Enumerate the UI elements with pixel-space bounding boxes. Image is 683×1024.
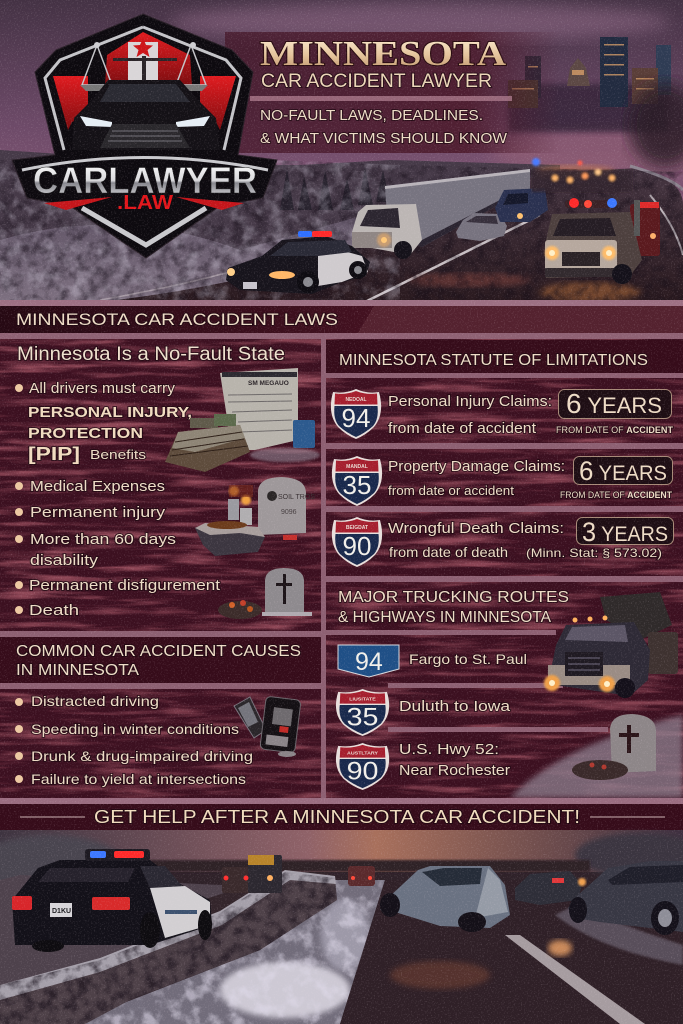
heading: statute of limitations: MINNESOTA STATUTE OF LIMITATIONS bbox=[339, 352, 648, 369]
icon: interstate shield 35: MANDAL bbox=[346, 464, 368, 470]
heading: no-fault state: Minnesota Is a No-Fault State bbox=[17, 344, 285, 365]
police car bbox=[226, 231, 370, 294]
bullet list: causes: Failure to yield at intersections bbox=[31, 771, 246, 787]
bullet list: PIP benefits bbox=[15, 381, 220, 619]
box truck trailer bbox=[385, 169, 530, 247]
row: personal injury claims, I-94 bbox=[331, 388, 673, 439]
logo: CarLawyer.law shield bbox=[12, 14, 277, 258]
icon: interstate shield 90: 90 bbox=[343, 531, 371, 561]
heading: common causes: COMMON CAR ACCIDENT CAUSES bbox=[16, 643, 301, 660]
concrete barrier with snow bbox=[0, 870, 340, 1024]
row: personal injury claims, I-94: 6 YEARS bbox=[566, 388, 662, 419]
tagline line 1: NO-FAULT LAWS, DEADLINES. bbox=[260, 107, 483, 124]
route 90 shield and label bbox=[336, 742, 510, 790]
heading: statute of limitations bbox=[326, 340, 683, 373]
title panel bbox=[225, 32, 560, 153]
icon: candles, headstone and basket bbox=[195, 477, 315, 556]
subtitle: car accident lawyer: CAR ACCIDENT LAWYER bbox=[261, 71, 492, 92]
police car rear view bbox=[12, 849, 212, 952]
bullet list: PIP benefits: Death bbox=[29, 603, 79, 619]
snowy forest and field bbox=[0, 83, 683, 302]
row: personal injury claims, I-94: FROM DATE OF ACCIDENT bbox=[556, 425, 673, 436]
icon: insurance documents and cash stack bbox=[165, 368, 320, 472]
white pickup truck bbox=[352, 204, 422, 259]
emergency truck front bbox=[545, 198, 642, 284]
logo wordmark: CARLAWYER bbox=[33, 160, 257, 201]
icon: interstate shield 35 bbox=[332, 456, 382, 506]
call to action band: GET HELP AFTER A MINNESOTA CAR ACCIDENT! bbox=[94, 807, 580, 827]
row: property damage claims, I-35: from date or accident bbox=[388, 484, 515, 498]
icon: interstate shield 94: NEDOAL bbox=[345, 397, 367, 403]
route 90 shield and label: 90 bbox=[347, 757, 378, 785]
call to action band bbox=[0, 798, 683, 830]
row: wrongful death claims, I-90: Wrongful Death Claims: bbox=[388, 520, 564, 537]
tagline line 2: & WHAT VICTIMS SHOULD KNOW bbox=[260, 130, 508, 147]
panel: no-fault state bbox=[0, 339, 321, 631]
row: property damage claims, I-35: Property Damage Claims: bbox=[388, 458, 565, 475]
bullet list: causes bbox=[15, 693, 253, 787]
route 90 shield and label: U.S. Hwy 52: bbox=[399, 742, 499, 758]
bullet list: PIP benefits: Medical Expenses bbox=[30, 479, 165, 495]
bullet list: PIP benefits: Permanent disfigurement bbox=[29, 578, 220, 594]
heading: trucking routes: & HIGHWAYS IN MINNESOTA bbox=[338, 609, 552, 626]
row: property damage claims, I-35: FROM DATE OF ACCIDENT bbox=[560, 490, 672, 501]
bullet list: PIP benefits: All drivers must carry bbox=[29, 381, 176, 397]
bullet list: PIP benefits: Permanent injury bbox=[30, 505, 166, 521]
route 90 shield and label: AUSTLTARY bbox=[347, 751, 379, 756]
bullet list: PIP benefits: Benefits bbox=[90, 447, 147, 462]
distant traffic and lights bbox=[532, 158, 632, 192]
bullet list: PIP benefits: disability bbox=[30, 553, 99, 569]
bullet list: PIP benefits: More than 60 days bbox=[30, 532, 176, 548]
bullet list: PIP benefits: PERSONAL INJURY, bbox=[28, 404, 192, 421]
row: wrongful death claims, I-90: from date of death bbox=[389, 544, 508, 560]
bullet list: causes: Distracted driving bbox=[31, 693, 159, 709]
parked sedan bbox=[515, 871, 586, 905]
section band: Minnesota car accident laws bbox=[0, 300, 683, 339]
row: property damage claims, I-35: 6 YEARS bbox=[579, 456, 667, 486]
panel: statute of limitations bbox=[326, 339, 683, 631]
route 94 sign and label: 94 bbox=[355, 648, 383, 676]
bullet list: causes: Speeding in winter conditions bbox=[31, 721, 239, 737]
icon: semi truck bbox=[544, 592, 678, 698]
logo .law: .LAW bbox=[117, 192, 173, 214]
route 90 shield and label: Near Rochester bbox=[399, 763, 510, 779]
icon: interstate shield 94 bbox=[331, 389, 381, 439]
snowy median bbox=[70, 880, 390, 1024]
icon: gravestone with cross bbox=[218, 568, 312, 619]
row: wrongful death claims, I-90: 3 YEARS bbox=[582, 517, 668, 547]
icon: insurance documents and cash stack: SM MEGAUO bbox=[248, 380, 289, 387]
heading: common causes: IN MINNESOTA bbox=[16, 662, 140, 679]
crashed SUV bbox=[380, 866, 510, 932]
icon: candles, headstone and basket: 9096 bbox=[281, 509, 297, 516]
distant tow truck and car bbox=[222, 855, 375, 893]
route 94 sign and label bbox=[338, 645, 527, 677]
icon: candles, headstone and basket: SOIL TROS bbox=[278, 494, 315, 501]
heading: trucking routes bbox=[338, 589, 569, 626]
icon: interstate shield 94: 94 bbox=[342, 403, 370, 433]
panel: common causes bbox=[0, 631, 321, 799]
route 35 shield and label: LIUSITATE bbox=[349, 697, 377, 702]
wet highway bbox=[100, 165, 683, 302]
heading: trucking routes: MAJOR TRUCKING ROUTES bbox=[338, 589, 569, 606]
vertical divider bbox=[321, 339, 326, 799]
icon: interstate shield 90: BEIGDAT bbox=[346, 525, 368, 531]
icon: smartphones bbox=[234, 696, 301, 757]
bullet list: PIP benefits: PROTECTION bbox=[28, 425, 143, 442]
icy road bbox=[340, 880, 683, 1024]
blue pickup bbox=[495, 188, 548, 222]
dark SUV at right bbox=[568, 861, 683, 935]
bullet list: causes: Drunk & drug-impaired driving bbox=[31, 748, 253, 764]
row: property damage claims, I-35 bbox=[332, 456, 672, 506]
row: personal injury claims, I-94: Personal Injury Claims: bbox=[388, 393, 552, 410]
route 35 shield and label: 35 bbox=[347, 703, 378, 731]
heading: common causes bbox=[0, 637, 321, 683]
title: Minnesota: MINNESOTA bbox=[260, 34, 507, 73]
bullet list: PIP benefits: [PIP] bbox=[28, 444, 80, 464]
row: wrongful death claims, I-90: (Minn. Stat: § 573.02) bbox=[526, 546, 662, 560]
icon: interstate shield 35: 35 bbox=[343, 470, 371, 500]
row: wrongful death claims, I-90 bbox=[332, 517, 674, 567]
bottom scene: crash on icy highway bbox=[0, 830, 683, 1024]
red rescue truck bbox=[630, 202, 660, 256]
silver sedan bbox=[456, 213, 507, 241]
route 35 shield and label bbox=[336, 689, 511, 736]
icon: interstate shield 90 bbox=[332, 517, 382, 567]
route 94 sign and label: Fargo to St. Paul bbox=[409, 651, 527, 667]
row: personal injury claims, I-94: from date of accident bbox=[388, 421, 536, 437]
route 35 shield and label: Duluth to Iowa bbox=[399, 699, 511, 715]
icon: gravestone in snow bbox=[572, 714, 656, 780]
city skyline bbox=[508, 37, 671, 132]
hero scene: winter highway with emergency vehicles bbox=[0, 0, 683, 302]
section band: Minnesota car accident laws: MINNESOTA CAR ACCIDENT LAWS bbox=[16, 310, 338, 329]
police car rear view: D1KU bbox=[52, 908, 71, 915]
panel: major trucking routes bbox=[326, 582, 683, 798]
icon: car front bbox=[72, 80, 220, 150]
